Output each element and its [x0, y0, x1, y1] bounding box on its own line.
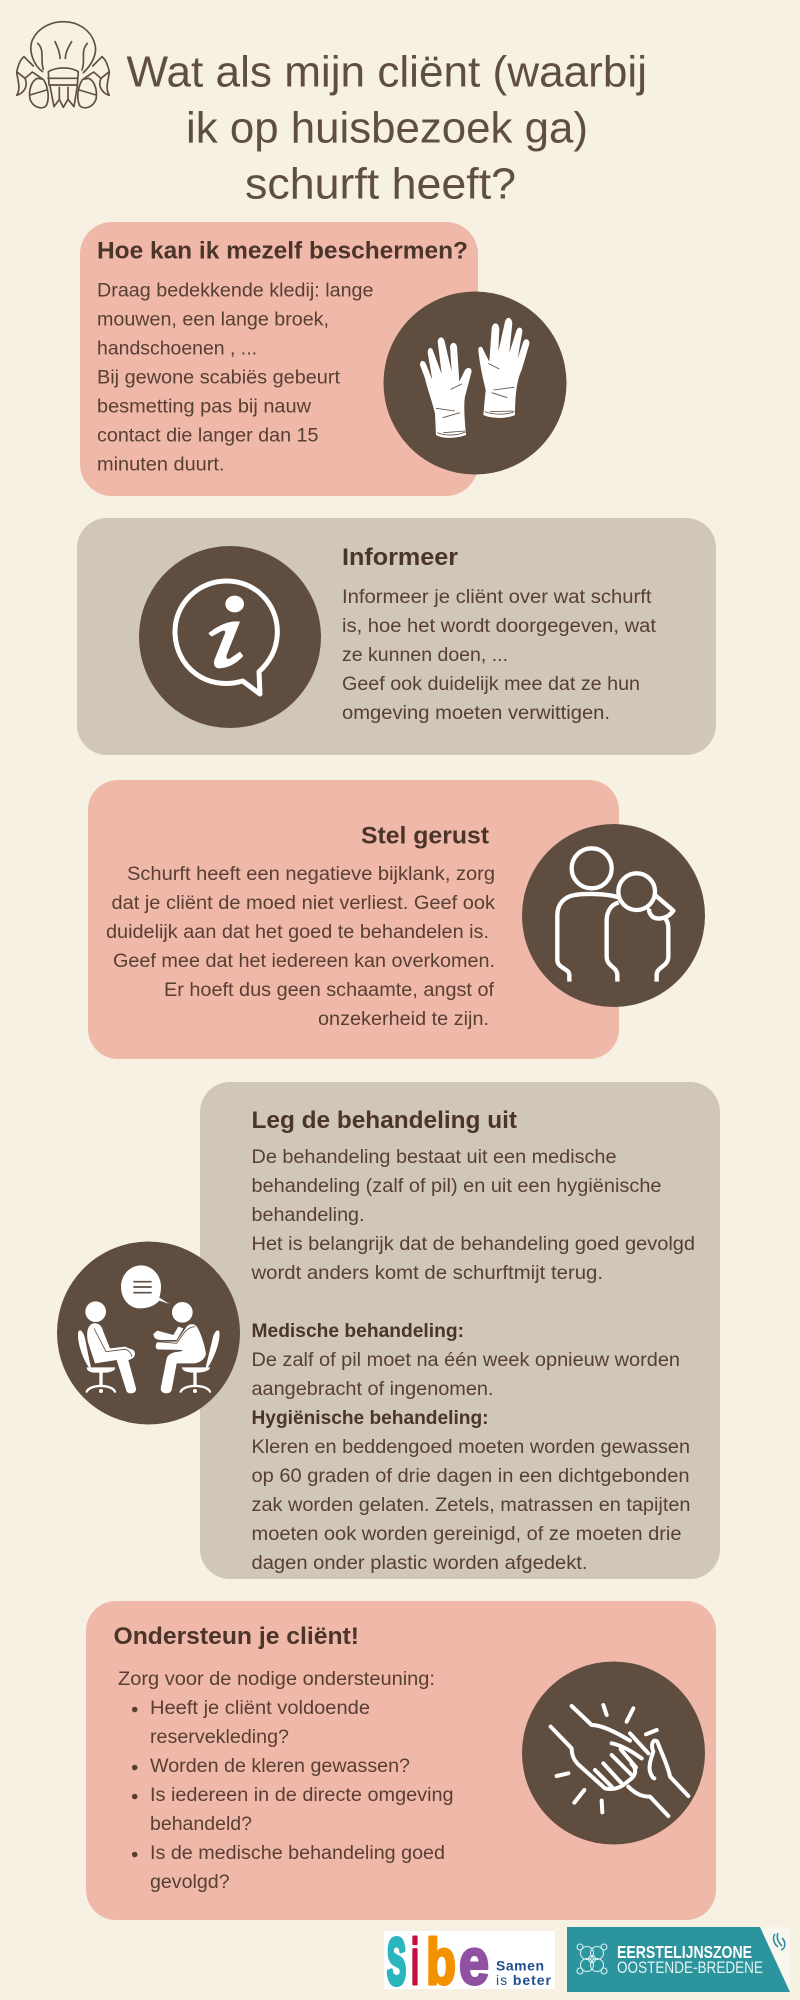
title: schurft heeft? [245, 160, 516, 208]
text: bescherming [97, 280, 374, 476]
text: intro ondersteuning: Zorg voor de nodige ondersteuning: [118, 1669, 435, 1690]
text: informeer: Geef ook duidelijk mee dat ze hun [342, 674, 640, 695]
text: hygiënische behandeling [252, 1408, 690, 1574]
text: stel gerust: dat je cliënt de moed niet verliest. Geef ook [112, 893, 496, 914]
text: stel gerust: Schurft heeft een negatieve bijklank, zorg [127, 864, 495, 885]
text: hygiënische behandeling: zak worden gelaten. Zetels, matrassen en tapijten [252, 1495, 690, 1516]
text: informeer: is, hoe het wordt doorgegeven, wat [342, 616, 657, 637]
text: medische behandeling: aangebracht of ingenomen. [252, 1379, 494, 1400]
text: bescherming: handschoenen , ... [97, 338, 257, 360]
text: behandeling intro: De behandeling bestaat uit een medische [252, 1147, 616, 1168]
text: informeer: ze kunnen doen, ... [342, 645, 508, 666]
title: Wat als mijn cliënt (waarbij [126, 48, 647, 96]
heading: informeer: Informeer [342, 544, 458, 571]
icon: info speech bubble [139, 546, 321, 728]
title: ik op huisbezoek ga) [186, 104, 588, 152]
text: behandeling intro [250, 1147, 695, 1284]
bullet list: ondersteuning: Worden de kleren gewassen? [150, 1756, 410, 1777]
text: hygiënische behandeling: moeten ook worden gereinigd, of ze moeten drie [252, 1524, 682, 1545]
logo: Sibe Samen is beter [384, 1925, 555, 1998]
text: stel gerust [106, 864, 496, 1030]
logo: Sibe Samen is beter: i [411, 1925, 419, 1998]
panel: hoe kan ik mezelf beschermen [80, 222, 478, 496]
heading: ondersteun: Ondersteun je cliënt! [114, 1623, 359, 1650]
bullet list: ondersteuning: behandeld? [150, 1814, 252, 1835]
icon: scabies mite [17, 22, 109, 108]
logo: Eerstelijnszone Oostende-Bredene [567, 1927, 790, 1992]
icon: helping hands [522, 1662, 705, 1844]
panel: ondersteun je cliënt [86, 1601, 716, 1920]
heading: behandeling: Leg de behandeling uit [252, 1107, 517, 1134]
logo: Sibe Samen is beter: b [426, 1925, 456, 1998]
text: stel gerust: Geef mee dat het iedereen kan overkomen. [113, 951, 495, 972]
icon: gloves [384, 292, 566, 474]
icon: conversation between two seated people [57, 1242, 240, 1424]
text: medische behandeling: Medische behandeling: [252, 1321, 464, 1342]
title [126, 48, 647, 208]
logo: Eerstelijnszone Oostende-Bredene: EERSTELIJNSZONE [617, 1942, 752, 1962]
logo: Sibe Samen is beter: Samen [496, 1958, 544, 1974]
text: bescherming: mouwen, een lange broek, [97, 310, 329, 330]
text: informeer [342, 587, 657, 724]
text: stel gerust: onzekerheid te zijn. [318, 1009, 489, 1030]
panel: leg de behandeling uit [57, 1082, 720, 1579]
text: bescherming: Bij gewone scabiës gebeurt [97, 368, 341, 388]
text: informeer: Informeer je cliënt over wat schurft [342, 587, 652, 608]
text: medische behandeling: De zalf of pil moet na één week opnieuw worden [252, 1350, 680, 1371]
text: hygiënische behandeling: Kleren en beddengoed moeten worden gewassen [252, 1437, 690, 1458]
bullet list: ondersteuning: reservekleding? [150, 1727, 289, 1748]
bullet list: ondersteuning: Heeft je cliënt voldoende [150, 1698, 370, 1719]
text: stel gerust: duidelijk aan dat het goed te behandelen is. [106, 922, 489, 943]
text: bescherming: Draag bedekkende kledij: lange [97, 280, 374, 302]
heading: bescherming: Hoe kan ik mezelf beschermen? [97, 238, 468, 264]
text: behandeling intro: behandeling. [252, 1205, 364, 1226]
text: informeer: omgeving moeten verwittigen. [342, 703, 610, 724]
bullet list: ondersteuning [132, 1698, 454, 1893]
text: behandeling intro: behandeling (zalf of pil) en uit een hygiënische [252, 1176, 662, 1197]
logo: Sibe Samen is beter: S [387, 1925, 406, 1998]
icon: comforting people [522, 824, 705, 1007]
text: bescherming: besmetting pas bij nauw [97, 396, 311, 418]
text: behandeling intro: wordt anders komt de schurftmijt terug. [250, 1263, 603, 1284]
heading: stel gerust: Stel gerust [361, 822, 489, 850]
logo: Eerstelijnszone Oostende-Bredene: OOSTENDE-BREDENE [617, 1958, 763, 1977]
bullet list: ondersteuning: gevolgd? [150, 1872, 230, 1893]
logo: Sibe Samen is beter: e [459, 1925, 489, 1998]
text: hygiënische behandeling: op 60 graden of drie dagen in een dichtgebonden [252, 1466, 690, 1487]
panel: informeer [77, 518, 716, 755]
text: bescherming: minuten duurt. [97, 454, 224, 476]
text: stel gerust: Er hoeft dus geen schaamte, angst of [164, 980, 495, 1001]
text: medische behandeling [252, 1321, 680, 1400]
text: behandeling intro: Het is belangrijk dat de behandeling goed gevolgd [252, 1234, 695, 1255]
bullet list: ondersteuning: Is iedereen in de directe omgeving [150, 1785, 454, 1806]
panel: stel gerust [88, 780, 705, 1059]
text: hygiënische behandeling: Hygiënische behandeling: [252, 1408, 488, 1429]
text: hygiënische behandeling: dagen onder plastic worden afgedekt. [252, 1553, 588, 1574]
logo: Sibe Samen is beter: is beter [496, 1972, 552, 1988]
text: bescherming: contact die langer dan 15 [97, 426, 318, 446]
bullet list: ondersteuning: Is de medische behandeling goed [150, 1843, 445, 1864]
